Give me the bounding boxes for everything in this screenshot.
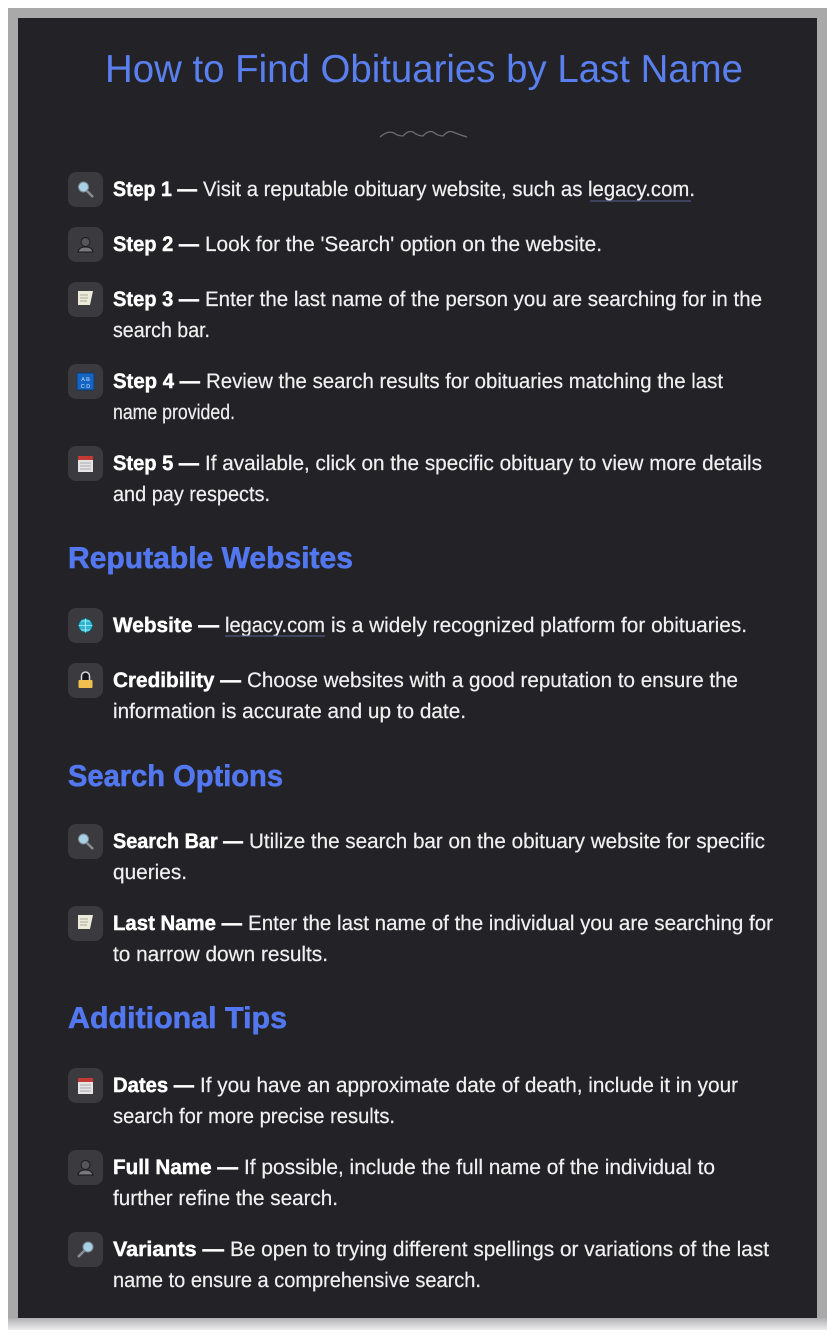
website item: is a widely recognized platform for obituaries.: [331, 614, 747, 637]
variants item: [68, 1232, 769, 1292]
last name item: [68, 906, 773, 966]
step 5: If available, click on the specific obituary to view more details: [205, 452, 762, 475]
icon: memo: [68, 906, 103, 941]
icon: ABCD tile: A B: [81, 377, 90, 383]
step 4: Review the search results for obituaries matching the last: [206, 370, 723, 393]
search bar item: Search Bar —: [113, 830, 243, 853]
dates item: [68, 1068, 738, 1128]
variants item: Variants —: [113, 1238, 224, 1261]
full name item: If possible, include the full name of the individual to: [244, 1156, 715, 1179]
variants item: Be open to trying different spellings or variations of the last: [230, 1238, 769, 1261]
last name item: Last Name —: [113, 912, 242, 935]
icon: person: [68, 1150, 103, 1185]
dates item: Dates —: [113, 1074, 194, 1097]
step 4: [68, 364, 723, 424]
step 2: Look for the 'Search' option on the website.: [205, 233, 602, 256]
step 5: [68, 446, 762, 506]
full name item: [68, 1150, 715, 1210]
step 3: Step 3 —: [113, 288, 199, 311]
panel: steps: [68, 172, 762, 506]
icon: magnifier: [68, 172, 103, 207]
last name item: to narrow down results.: [113, 943, 328, 966]
icon: calendar: [68, 446, 103, 481]
step 2: Step 2 —: [113, 233, 199, 256]
icon: magnifier: [68, 824, 103, 859]
icon: globe: [68, 608, 103, 643]
website item: [68, 608, 747, 643]
step 4: Step 4 —: [113, 370, 200, 393]
website item: legacy.com: [225, 614, 325, 637]
wavy divider: [380, 132, 467, 137]
heading: search options: Search Options: [68, 760, 283, 793]
step 3: search bar.: [113, 319, 210, 342]
website item: Website —: [113, 614, 219, 637]
title: How to Find Obituaries by Last Name: [105, 48, 743, 91]
heading: reputable websites: Reputable Websites: [68, 542, 353, 575]
icon: ABCD tile: C D: [81, 384, 90, 390]
icon: person: [68, 227, 103, 262]
panel: additional tips: [68, 1068, 769, 1292]
icon: calendar: [68, 1068, 103, 1103]
panel: search options: [68, 824, 773, 966]
step 2: [68, 227, 602, 262]
dates item: If you have an approximate date of death, include it in your: [200, 1074, 738, 1097]
panel: reputable websites: [68, 608, 747, 723]
step 1: Step 1 —: [113, 178, 197, 201]
credibility item: Credibility —: [113, 669, 241, 692]
step 3: Enter the last name of the person you are searching for in the: [205, 288, 762, 311]
credibility item: information is accurate and up to date.: [113, 700, 466, 723]
full name item: Full Name —: [113, 1156, 238, 1179]
variants item: name to ensure a comprehensive search.: [113, 1269, 481, 1292]
heading: additional tips: Additional Tips: [68, 1002, 287, 1035]
step 5: Step 5 —: [113, 452, 199, 475]
search bar item: queries.: [113, 861, 187, 884]
step 4: name provided.: [113, 401, 235, 424]
search bar item: [68, 824, 765, 884]
step 1: Visit a reputable obituary website, such as legacy.com.: [203, 178, 695, 201]
step 1: [68, 172, 695, 207]
icon: right-tilted magnifier: [68, 1232, 103, 1267]
last name item: Enter the last name of the individual you are searching for: [248, 912, 773, 935]
icon: ABCD tile: [68, 364, 103, 399]
full name item: further refine the search.: [113, 1187, 338, 1210]
search bar item: Utilize the search bar on the obituary website for specific: [249, 830, 765, 853]
step 3: [68, 282, 762, 342]
credibility item: Choose websites with a good reputation to ensure the: [247, 669, 738, 692]
step 5: and pay respects.: [113, 483, 270, 506]
credibility item: [68, 663, 738, 723]
icon: lock: [68, 663, 103, 698]
dates item: search for more precise results.: [113, 1105, 395, 1128]
icon: memo: [68, 282, 103, 317]
